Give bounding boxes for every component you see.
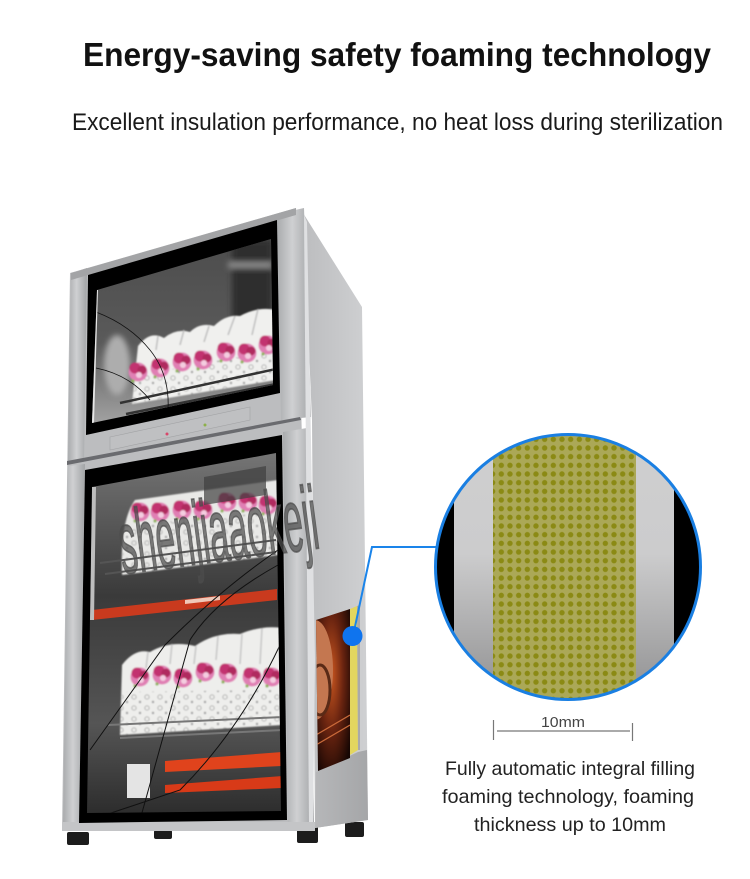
glass cracks — [90, 550, 280, 820]
top edge strip — [71, 208, 296, 280]
upper glass cracks — [96, 312, 168, 410]
caption: Fully automatic integral filling — [445, 758, 695, 780]
cabinet side panel — [303, 213, 368, 828]
lower glass left highlight — [90, 487, 96, 620]
white block — [127, 764, 150, 798]
upper door frame — [86, 220, 280, 435]
upper glass backdrop — [92, 239, 273, 423]
cabinet feet — [67, 822, 364, 845]
top plates — [122, 480, 278, 575]
upper glass — [92, 239, 273, 423]
upper rack — [120, 369, 276, 414]
subtitle: Excellent insulation performance, no heat loss during sterilization — [72, 109, 723, 136]
connector line — [353, 547, 436, 636]
bottom plates — [120, 627, 282, 735]
cabinet front body — [62, 208, 312, 831]
product: disinfection cabinet — [62, 208, 368, 845]
title: Energy-saving safety foaming technology — [83, 36, 712, 73]
second indicator — [204, 424, 206, 426]
upper right post — [277, 208, 311, 420]
lower right post — [283, 428, 314, 826]
magnified foam detail circle — [430, 430, 710, 705]
lower left post — [63, 464, 85, 828]
side edge highlight — [304, 215, 315, 825]
connector dot — [342, 626, 362, 646]
upper control panel — [110, 407, 250, 450]
lower glass — [85, 450, 285, 820]
label on the glass — [204, 466, 266, 505]
seam between upper and lower doors — [67, 417, 301, 465]
right steel band — [636, 455, 674, 679]
upper glass reflection — [104, 240, 272, 395]
heater highlight — [185, 596, 220, 604]
caption: thickness up to 10mm — [474, 814, 666, 836]
circle outline — [436, 434, 700, 700]
caption — [442, 758, 695, 836]
middle heater — [92, 589, 277, 620]
black door edges — [437, 490, 699, 644]
lower door frame — [79, 435, 287, 823]
upper glass left highlight — [92, 290, 98, 423]
lower glass backdrop — [85, 450, 285, 815]
caption: foaming technology, foaming — [442, 786, 694, 808]
watermark: shenjiaaokeji — [113, 469, 324, 594]
side cut-out interior — [316, 609, 350, 771]
upper left post — [68, 268, 87, 464]
heater tubes — [165, 752, 282, 793]
middle rack — [100, 540, 276, 574]
dimension label: 10mm — [541, 715, 585, 731]
bottom rack — [108, 717, 282, 738]
dimension marker — [494, 715, 632, 741]
foam band — [493, 430, 636, 705]
side panel lower section — [315, 750, 368, 828]
foam dots — [493, 430, 636, 705]
bottom strip — [62, 822, 315, 831]
foam insulation layer — [350, 606, 358, 755]
steel bands — [454, 460, 493, 674]
upper plates — [128, 309, 278, 404]
plate inside cut-out — [316, 620, 350, 745]
foam layer edge — [357, 605, 360, 750]
indicator lights — [166, 432, 168, 436]
